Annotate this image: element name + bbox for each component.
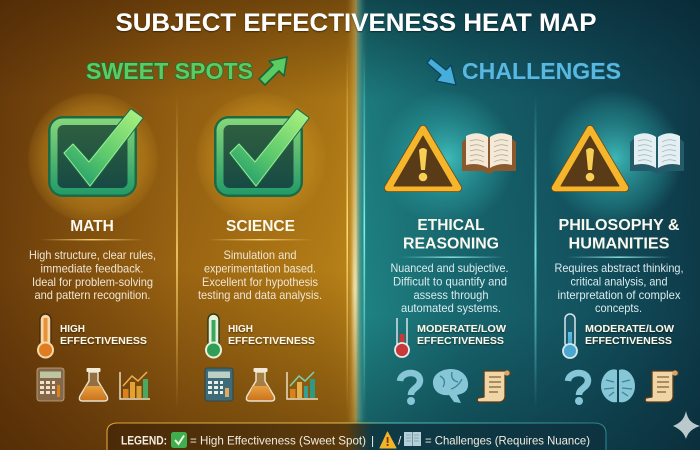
legend icon: warning	[380, 432, 396, 448]
icon: scroll ethical	[477, 370, 510, 402]
description ethical: Difficult to quantify and	[393, 276, 507, 288]
heading: challenges: CHALLENGES	[462, 58, 621, 84]
description philosophy	[554, 262, 684, 315]
description ethical	[390, 262, 508, 315]
effectiveness label math: HIGH	[60, 324, 85, 335]
icon: warning triangle philosophy	[555, 129, 625, 188]
icon: question mark philosophy	[568, 373, 588, 405]
subject label ethical: ETHICAL	[417, 217, 485, 234]
description ethical: automated systems.	[401, 302, 501, 315]
icon: open book ethical	[462, 133, 516, 174]
legend text: high effectiveness: = High Effectiveness (Sweet Spot)	[190, 434, 366, 448]
icon: brain side ethical	[433, 369, 468, 403]
description science: Excellent for hypothesis	[202, 276, 318, 289]
description ethical: Nuanced and subjective.	[390, 262, 508, 275]
effectiveness label ethical: MODERATE/LOW	[417, 324, 507, 335]
watermark sparkle	[673, 411, 700, 439]
icon: growth chart science	[287, 372, 318, 399]
title: SUBJECT EFFECTIVENESS HEAT MAP	[116, 9, 596, 37]
legend	[107, 423, 606, 450]
arrow: up right	[259, 57, 287, 85]
icon: question mark ethical	[400, 373, 420, 405]
description science	[198, 249, 322, 302]
subject label philosophy: PHILOSOPHY &	[558, 217, 680, 234]
icon: calculator science	[205, 368, 233, 401]
description philosophy: critical analysis, and	[570, 276, 668, 288]
panel: math	[27, 92, 159, 401]
effectiveness label ethical: EFFECTIVENESS	[417, 336, 504, 347]
icon: flask science	[246, 368, 275, 401]
icon: growth chart math	[120, 372, 150, 399]
legend label: LEGEND:	[121, 434, 167, 448]
column dividers	[176, 95, 536, 410]
panel: ethical reasoning	[379, 90, 516, 405]
subject label math: MATH	[70, 218, 114, 235]
thermometer science	[206, 314, 221, 358]
subject label ethical: REASONING	[403, 236, 499, 252]
thermometer philosophy	[563, 314, 577, 358]
effectiveness label science: EFFECTIVENESS	[228, 336, 315, 347]
icon: flask math	[79, 368, 108, 401]
subject label science: SCIENCE	[226, 218, 295, 235]
description philosophy: Requires abstract thinking,	[554, 262, 684, 275]
icon: brain top philosophy	[601, 369, 635, 402]
icon: calculator math	[37, 368, 64, 401]
panel: philosophy and humanities	[547, 90, 684, 405]
legend icon: book	[404, 432, 421, 446]
description math: High structure, clear rules,	[29, 249, 156, 262]
effectiveness label philosophy: EFFECTIVENESS	[585, 336, 672, 347]
legend separator: |	[371, 434, 374, 448]
description science: testing and data analysis.	[198, 289, 322, 302]
icon: check box science	[214, 110, 308, 197]
description philosophy: interpretation of complex	[558, 289, 681, 302]
subject label philosophy: HUMANITIES	[568, 236, 670, 252]
description math: Ideal for problem-solving	[32, 276, 153, 289]
effectiveness label philosophy: MODERATE/LOW	[585, 324, 675, 335]
thermometer math	[38, 314, 53, 358]
description science: experimentation based.	[204, 262, 316, 276]
description math: and pattern recognition.	[34, 289, 150, 302]
description math	[29, 249, 156, 302]
panel: science	[195, 92, 327, 401]
description math: immediate feedback.	[40, 262, 144, 276]
icon: scroll philosophy	[645, 370, 678, 402]
legend slash: /	[398, 434, 402, 448]
central glowing seam	[346, 0, 365, 423]
heading: sweet spots: SWEET SPOTS	[86, 58, 253, 84]
arrow: down right	[427, 58, 456, 85]
description philosophy: concepts.	[595, 302, 642, 315]
icon: warning triangle ethical	[388, 129, 458, 188]
description ethical: assess through	[414, 289, 488, 302]
background: teal right half	[357, 0, 700, 450]
effectiveness label math: EFFECTIVENESS	[60, 336, 147, 347]
description science: Simulation and	[224, 249, 296, 262]
thermometer ethical	[395, 318, 409, 357]
background: warm left half	[0, 0, 357, 450]
legend text: challenges: = Challenges (Requires Nuance)	[425, 434, 590, 448]
icon: check box math	[48, 110, 142, 197]
effectiveness label science: HIGH	[228, 324, 253, 335]
legend icon: check	[171, 432, 187, 448]
icon: open book philosophy	[630, 133, 684, 174]
